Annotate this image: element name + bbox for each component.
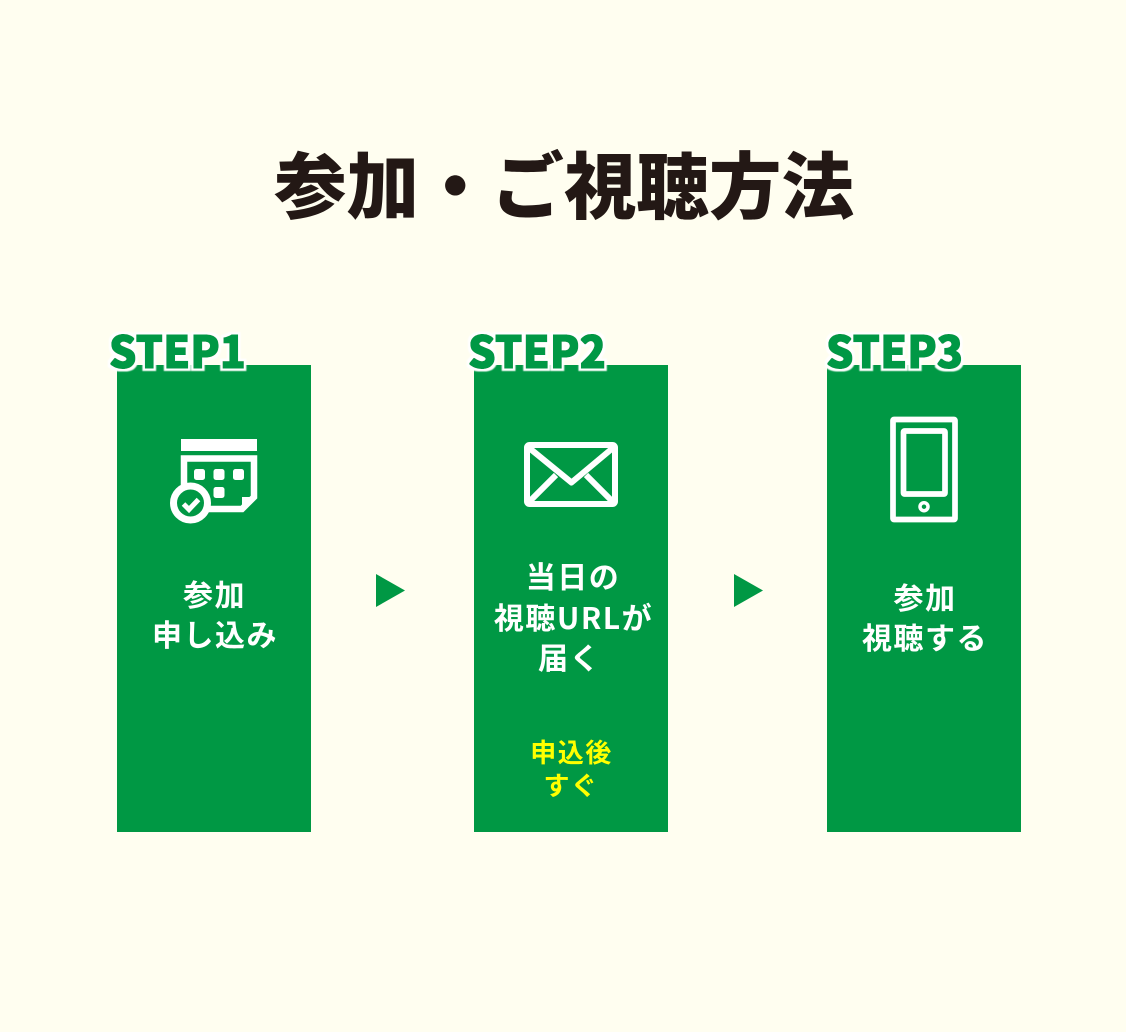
step 1 text: 申し込み [152,611,278,655]
step 2 timing note: すぐ [543,766,599,803]
step 2 text: 視聴URLが [494,594,653,638]
step 3 text: 視聴する [862,614,988,658]
step 3 text: 参加 [894,574,956,618]
icon: calendar with check mark [174,439,257,520]
panel: step 2 [468,317,668,832]
step 1 label: STEP1 [109,317,246,381]
step 2 label: STEP2 [468,317,606,381]
arrow 2 [734,574,763,607]
panel: step 1 [109,317,311,832]
step 2 timing note: 申込後 [530,733,613,770]
step 2 text: 当日の [526,553,620,597]
panel: step 3 [826,317,1021,832]
step 2 text: 届く [538,634,601,678]
icon: smartphone [893,420,955,520]
arrow 1 [376,574,405,607]
step 1 text: 参加 [183,571,246,615]
step 3 label: STEP3 [826,317,963,381]
icon: envelope [527,445,615,504]
title: 参加・ご視聴方法 [274,129,854,234]
